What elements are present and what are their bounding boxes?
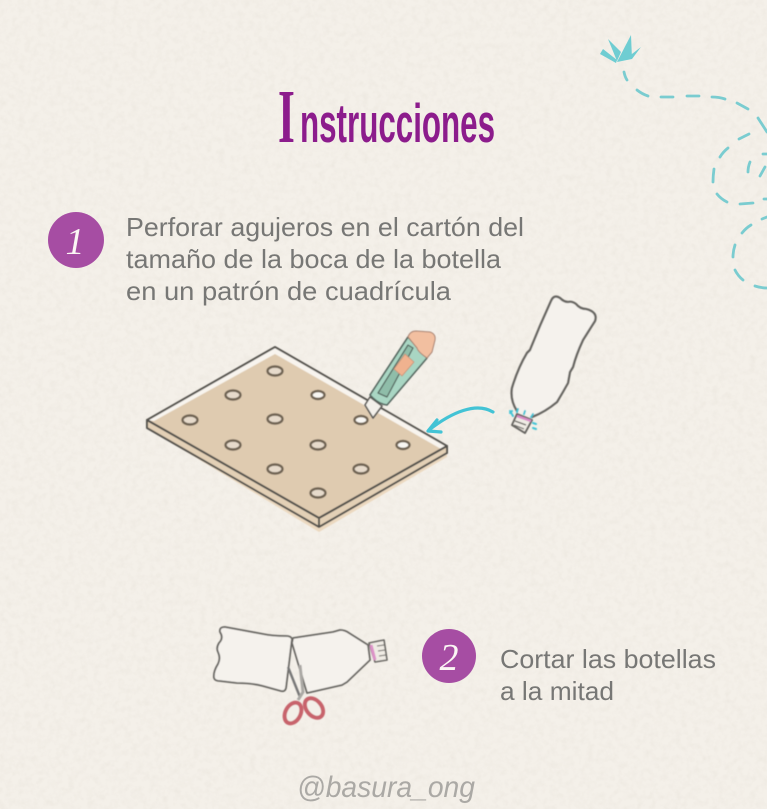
blue marks around bottle mouth [510,409,536,429]
icon: origami crane [600,35,641,63]
illustration: cardboard with holes [147,347,447,532]
step 1 text [126,212,524,306]
step 1 number badge [48,212,104,268]
step 1 number badge: 1 [66,221,84,263]
cardboard holes [182,366,410,498]
scissors [281,665,327,726]
step 2 text: a la mitad [500,676,614,706]
watermark: @basura_ong [297,771,475,804]
step 2 text [500,644,716,706]
bottle top half [292,630,370,693]
arrow: bottle to cardboard [428,408,493,432]
step 1 text: tamaño de la boca de la botella [126,244,502,274]
icon: box cutter [365,331,435,418]
step 1 text: en un patrón de cuadrícula [126,276,452,306]
bottle cap [369,640,387,662]
step 2 number badge [422,629,476,683]
illustration: bottle with marked mouth [510,297,596,433]
step 1 text: Perforar agujeros en el cartón del [126,212,524,242]
illustration: bottle cut in half with scissors [214,627,387,726]
bottle bottom half [214,627,292,691]
step 2 number badge: 2 [440,637,458,679]
step 2 text: Cortar las botellas [500,644,716,674]
title: Instrucciones [278,76,495,159]
dashed flight path [624,72,767,288]
